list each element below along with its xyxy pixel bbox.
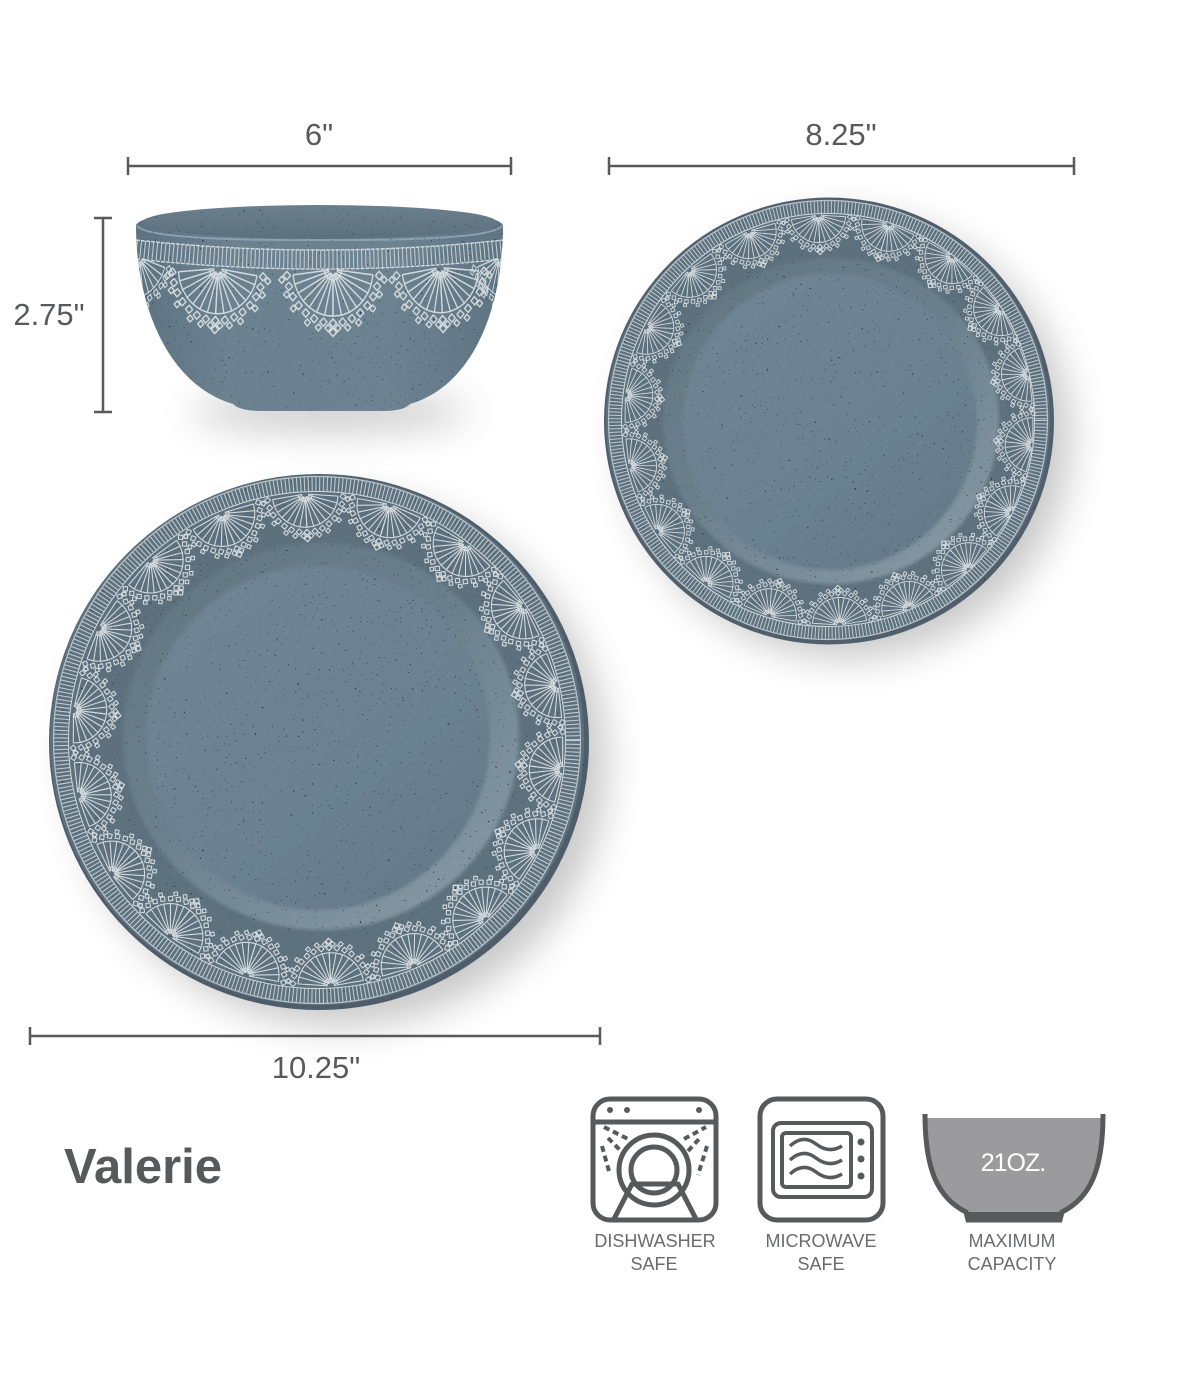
icon: bowl maximum capacity 21 oz: 21OZ. <box>981 1149 1045 1177</box>
icon: bowl maximum capacity 21 oz <box>925 1114 1103 1222</box>
dimension: small plate width 8.25 inches: 8.25" <box>805 117 877 152</box>
icon: microwave safe <box>760 1099 883 1220</box>
label: microwave safe: SAFE <box>797 1254 845 1274</box>
dimension: bowl width 6 inches <box>128 117 511 175</box>
dimension: bowl height 2.75 inches: 2.75" <box>13 297 85 332</box>
label: dishwasher safe: SAFE <box>630 1254 678 1274</box>
title: pattern name: Valerie <box>64 1140 222 1194</box>
dimension: large plate width 10.25 inches <box>30 1027 600 1085</box>
photo: small salad plate <box>600 195 1070 658</box>
dimension: bowl width 6 inches: 6" <box>305 117 333 152</box>
dimension: large plate width 10.25 inches: 10.25" <box>272 1050 360 1085</box>
photo: large dinner plate <box>45 470 606 1026</box>
dimension: small plate width 8.25 inches <box>609 117 1074 175</box>
label: maximum capacity: MAXIMUM <box>968 1231 1056 1251</box>
icon: dishwasher safe <box>593 1099 716 1220</box>
dimension: bowl height 2.75 inches <box>13 218 112 412</box>
photo: bowl <box>136 205 503 449</box>
label: dishwasher safe: DISHWASHER <box>594 1231 716 1251</box>
label: maximum capacity: CAPACITY <box>968 1254 1056 1274</box>
label: microwave safe: MICROWAVE <box>766 1231 876 1251</box>
